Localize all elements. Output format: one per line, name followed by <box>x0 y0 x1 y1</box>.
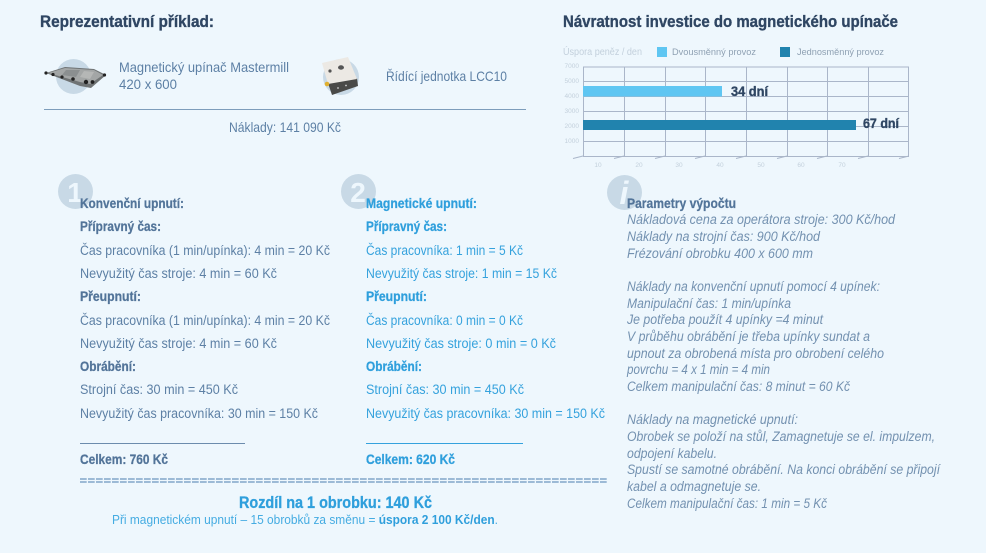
magnetic clamping text <box>366 196 605 467</box>
panel: calculation parameters <box>607 175 941 511</box>
conventional clamping text: Nevyužitý čas pracovníka: 30 min = 150 Kč <box>80 406 318 421</box>
y axis labels: 2000 <box>565 123 579 130</box>
magnetic clamping text: Čas pracovníka: 1 min = 5 Kč <box>366 243 523 258</box>
result: daily saving: Při magnetickém upnutí – 15 obrobků za směnu = úspora 2 100 Kč/den. <box>112 512 498 527</box>
parameters text: Nákladová cena za operátora stroje: 300 Kč/hod <box>627 212 895 227</box>
magnetic clamping text: Nevyužitý čas stroje: 0 min = 0 Kč <box>366 336 556 351</box>
icon: magnetic chuck <box>44 59 106 94</box>
y axis labels: 4000 <box>565 93 579 100</box>
conventional clamping text: Nevyužitý čas stroje: 4 min = 60 Kč <box>80 336 277 351</box>
magnetic clamping text: Nevyužitý čas stroje: 1 min = 15 Kč <box>366 266 557 281</box>
parameters text: Náklady na strojní čas: 900 Kč/hod <box>627 229 820 244</box>
conventional clamping text: Celkem: 760 Kč <box>80 452 168 467</box>
parameters text: V průběhu obrábění je třeba upínky sundat a <box>627 329 870 344</box>
panel: conventional clamping <box>58 174 330 467</box>
x axis labels <box>594 162 846 169</box>
panel: magnetic clamping <box>341 174 605 467</box>
cost total: Náklady: 141 090 Kč <box>229 119 341 135</box>
bar: two shift operation <box>583 86 722 96</box>
y axis labels <box>565 63 579 145</box>
legend: Úspora peněz / den <box>563 45 642 58</box>
parameters text: odpojení kabelu. <box>627 446 717 461</box>
x axis labels: 20 <box>635 162 643 169</box>
icon: control unit <box>322 57 359 95</box>
parameters text: upnout za obrobená místa pro obrobení celého <box>627 346 884 361</box>
info badge: i <box>620 175 630 211</box>
label: chuck size: 420 x 600 <box>119 76 177 92</box>
magnetic clamping text: Celkem: 620 Kč <box>366 452 455 467</box>
conventional clamping text: Strojní čas: 30 min = 450 Kč <box>80 382 238 397</box>
info badge <box>607 175 642 211</box>
y axis labels: 3000 <box>565 108 579 115</box>
parameters text: Frézování obrobku 400 x 600 mm <box>627 246 813 261</box>
x axis labels: 50 <box>757 162 765 169</box>
y axis labels: 5000 <box>565 78 579 85</box>
panel: return on investment chart <box>563 12 909 169</box>
parameters text: Manipulační čas: 1 min/upínka <box>627 296 791 311</box>
parameters text: Celkem manipulační čas: 8 minut = 60 Kč <box>627 379 850 394</box>
conventional clamping text: Čas pracovníka (1 min/upínka): 4 min = 20 Kč <box>80 243 330 258</box>
parameters text <box>626 196 941 511</box>
conventional clamping text: Přípravný čas: <box>80 219 161 234</box>
conventional clamping text: Konvenční upnutí: <box>80 196 184 211</box>
number badge 1 <box>58 174 93 209</box>
magnetic clamping text: Přeupnutí: <box>366 289 427 304</box>
legend: Dvousměnný provoz <box>672 47 756 58</box>
x axis labels: 70 <box>838 162 846 169</box>
number badge 2: 2 <box>350 177 366 208</box>
magnetic clamping text: Čas pracovníka: 0 min = 0 Kč <box>366 313 523 328</box>
panel: representative example <box>40 12 526 135</box>
conventional clamping text: Přeupnutí: <box>80 289 141 304</box>
parameters text: Je potřeba použít 4 upínky =4 minut <box>626 312 824 327</box>
y axis labels: 7000 <box>565 63 579 70</box>
parameters text: Náklady na magnetické upnutí: <box>627 412 798 427</box>
bar label: 34 days: 34 dní <box>731 84 769 99</box>
label: control unit: Řídící jednotka LCC10 <box>386 68 507 84</box>
magnetic clamping text: Nevyužitý čas pracovníka: 30 min = 150 Kč <box>366 406 605 421</box>
magnetic clamping text: Strojní čas: 30 min = 450 Kč <box>366 382 524 397</box>
magnetic clamping text: Magnetické upnutí: <box>366 196 477 211</box>
legend <box>563 45 884 58</box>
parameters text: kabel a odmagnetuje se. <box>627 479 761 494</box>
result: difference per workpiece: Rozdíl na 1 obrobku: 140 Kč <box>239 493 432 512</box>
number badge 2 <box>341 174 376 209</box>
double rule separator <box>80 479 607 482</box>
parameters text: Parametry výpočtu <box>627 196 736 211</box>
parameters text: Obrobek se položí na stůl, Zamagnetuje se el. impulzem, <box>627 429 935 444</box>
magnetic clamping text: Obrábění: <box>366 359 422 374</box>
parameters text: Spustí se samotné obrábění. Na konci obrábění se připojí <box>627 462 941 477</box>
number badge 1: 1 <box>67 177 83 208</box>
x axis labels: 60 <box>797 162 805 169</box>
x axis labels: 10 <box>594 162 602 169</box>
label: magnetic chuck: Magnetický upínač Mastermill <box>119 59 289 75</box>
parameters text: povrchu = 4 x 1 min = 4 min <box>626 362 770 377</box>
parameters text: Náklady na konvenční upnutí pomocí 4 upínek: <box>627 279 880 294</box>
x axis labels: 30 <box>675 162 683 169</box>
conventional clamping text: Čas pracovníka (1 min/upínka): 4 min = 20 Kč <box>80 313 330 328</box>
legend: Jednosměnný provoz <box>797 47 884 58</box>
x axis labels: 40 <box>716 162 724 169</box>
bar label: 67 days: 67 dní <box>863 116 900 131</box>
conventional clamping text <box>80 196 330 467</box>
bar: one shift operation <box>583 120 856 130</box>
conventional clamping text: Obrábění: <box>80 359 136 374</box>
magnetic clamping text: Přípravný čas: <box>366 219 447 234</box>
parameters text: Celkem manipulační čas: 1 min = 5 Kč <box>627 496 827 511</box>
heading: return on investment: Návratnost investice do magnetického upínače <box>563 12 898 31</box>
chart grid <box>573 67 909 158</box>
conventional clamping text: Nevyužitý čas stroje: 4 min = 60 Kč <box>80 266 277 281</box>
y axis labels: 1000 <box>565 138 579 145</box>
heading: representative example: Reprezentativní příklad: <box>40 12 214 31</box>
